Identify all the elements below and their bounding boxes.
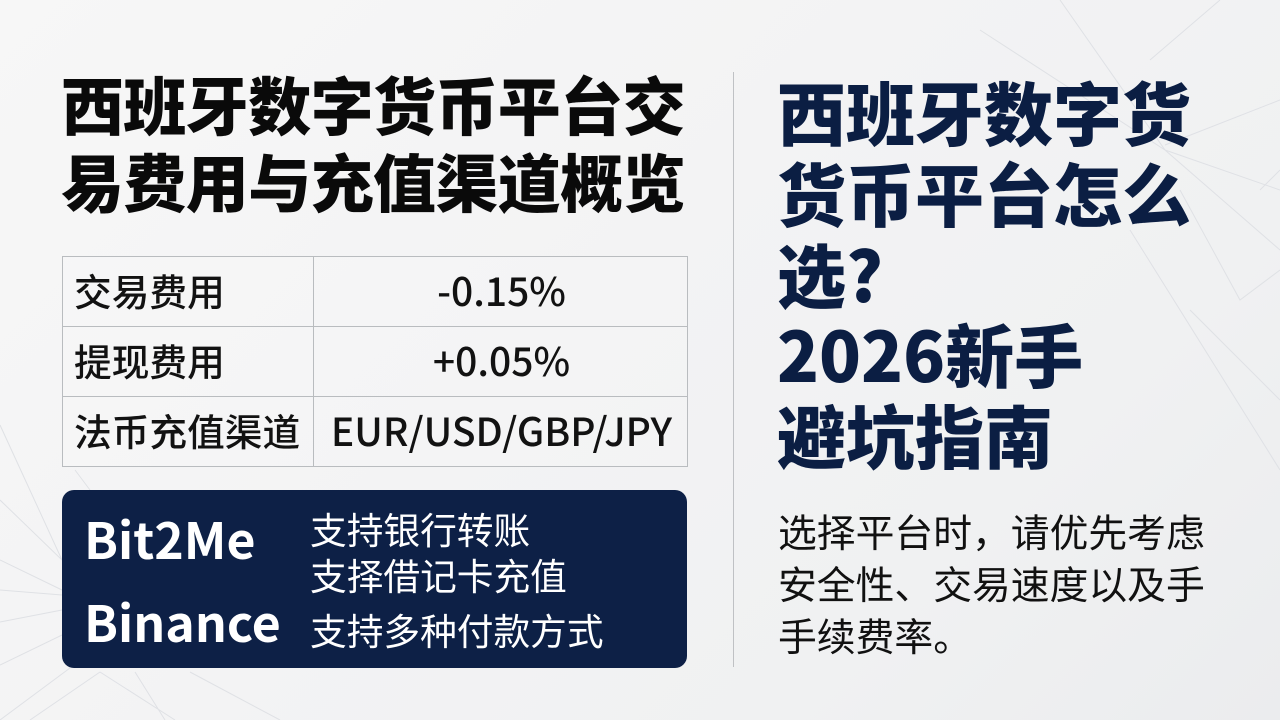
row: fiat deposit channels: 法币充值渠道 [74, 402, 300, 457]
row: withdrawal fee [74, 332, 570, 388]
right body text: 安全性、交易速度以及手 [778, 555, 1205, 611]
right title: 2026新手 [777, 302, 1083, 402]
right body text [778, 503, 1205, 663]
left title: 西班牙数字货币平台交 [61, 58, 685, 149]
right title: 西班牙数字货 [777, 60, 1191, 160]
right title [777, 60, 1191, 483]
right body text: 手续费率。 [778, 607, 972, 663]
Bit2Me notes [310, 501, 567, 601]
fee table [62, 256, 688, 467]
row: trading fee [74, 262, 566, 318]
Bit2Me name: Bit2Me [84, 502, 256, 574]
Binance name: Binance [84, 585, 281, 657]
row: withdrawal fee: 提现费用 [74, 332, 225, 387]
left title: 易费用与充值渠道概览 [61, 135, 685, 226]
row: trading fee: 交易费用 [74, 262, 225, 317]
Bit2Me notes: 支持银行转账 [310, 501, 530, 555]
right title: 货币平台怎么 [777, 141, 1191, 241]
left title [61, 58, 685, 226]
row: withdrawal fee: +0.05% [433, 332, 570, 388]
Binance note: 支持多种付款方式 [310, 602, 604, 656]
right body text: 选择平台时，请优先考虑 [778, 503, 1205, 559]
row: fiat deposit channels [74, 402, 672, 458]
vertical divider [733, 72, 734, 667]
right title: 选? [777, 222, 883, 322]
right title: 避坑指南 [777, 383, 1053, 483]
row: trading fee: -0.15% [437, 262, 566, 318]
row: fiat deposit channels: EUR/USD/GBP/JPY [331, 402, 672, 458]
platform panel [62, 490, 687, 668]
Bit2Me notes: 支择借记卡充值 [310, 547, 567, 601]
